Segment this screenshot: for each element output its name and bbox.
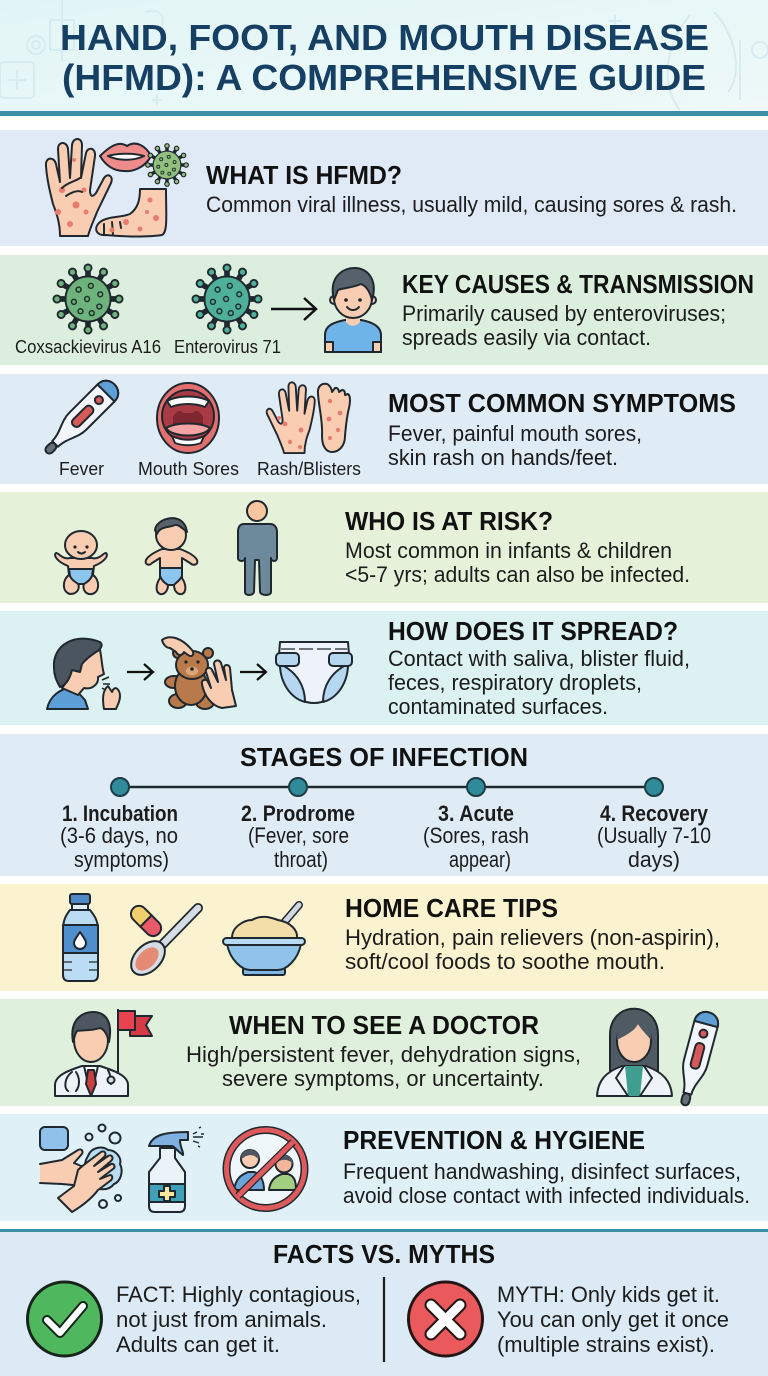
fact text: not just from animals. (116, 1307, 327, 1332)
heading: FACTS VS. MYTHS (273, 1239, 495, 1269)
panel: key causes (0, 255, 768, 365)
icon: capsule (128, 903, 164, 939)
label: Rash/Blisters (257, 458, 361, 479)
arrow (271, 298, 316, 320)
label: Coxsackievirus A16 (15, 336, 161, 357)
text: <5-7 yrs; adults can also be infected. (345, 562, 690, 587)
header rule (0, 111, 768, 116)
text: Common viral illness, usually mild, causing sores & rash. (206, 192, 737, 217)
label: Fever (59, 458, 104, 479)
heading: WHEN TO SEE A DOCTOR (229, 1010, 539, 1040)
text (402, 301, 726, 350)
panel: stages of infection (0, 734, 768, 876)
label: Mouth Sores (138, 458, 239, 479)
icon: child (325, 268, 381, 352)
panel: facts vs myths (0, 1229, 768, 1376)
icon: handwashing (40, 1124, 122, 1212)
heading: HOW DOES IT SPREAD? (388, 616, 678, 646)
icon: toddler (146, 518, 197, 594)
icon: check mark (28, 1282, 102, 1356)
label: Enterovirus 71 (174, 336, 281, 357)
text: Frequent handwashing, disinfect surfaces, (343, 1159, 741, 1184)
timeline (111, 778, 663, 796)
header (0, 0, 768, 111)
title: (HFMD): A COMPREHENSIVE GUIDE (62, 57, 706, 98)
icon: adult (238, 501, 277, 595)
stage 4: days) (628, 847, 680, 872)
text: Fever, painful mouth sores, (388, 421, 642, 446)
text (186, 1042, 581, 1091)
icon: spoon (125, 908, 198, 981)
panel: when to see a doctor (0, 999, 768, 1108)
text: Primarily caused by enteroviruses; (402, 301, 726, 326)
panel: what is HFMD (0, 130, 768, 246)
text: Hydration, pain relievers (non-aspirin), (345, 925, 720, 950)
fact text: FACT: Highly contagious, (116, 1282, 361, 1307)
heading: MOST COMMON SYMPTOMS (388, 388, 736, 418)
icon: female doctor (597, 1009, 672, 1096)
fact text: Adults can get it. (116, 1332, 280, 1357)
text: Contact with saliva, blister fluid, (388, 646, 690, 671)
heading: STAGES OF INFECTION (240, 742, 528, 772)
icon: hand, lips, virus and foot (46, 139, 188, 236)
icon: coxsackievirus (53, 264, 123, 334)
arrow (127, 664, 153, 680)
myth text: MYTH: Only kids get it. (497, 1282, 720, 1307)
icon: male doctor with red flag (55, 1009, 152, 1096)
text: spreads easily via contact. (402, 325, 651, 350)
stage 3: appear) (449, 847, 511, 872)
stage 1: (3-6 days, no (60, 823, 178, 848)
stage 1: 1. Incubation (62, 801, 178, 826)
icon: teddy bear and hands (162, 637, 236, 709)
icon: no close contact (226, 1130, 304, 1208)
stage 4: (Usually 7-10 (597, 823, 711, 848)
panel: how does it spread (0, 611, 768, 725)
divider (383, 1277, 385, 1362)
stage 1 (60, 801, 178, 872)
stage 3 (423, 801, 529, 872)
text: skin rash on hands/feet. (388, 445, 618, 470)
heading: WHAT IS HFMD? (206, 160, 402, 190)
stage 4: 4. Recovery (600, 801, 708, 826)
stage 1: symptoms) (74, 847, 169, 872)
text: Most common in infants & children (345, 538, 672, 563)
stage 2 (241, 801, 355, 872)
text: High/persistent fever, dehydration signs, (186, 1042, 581, 1067)
stage 2: throat) (274, 847, 328, 872)
icon: baby (55, 531, 107, 594)
icon: open mouth (157, 383, 219, 453)
panel: symptoms (0, 374, 768, 484)
icon: cross mark (408, 1282, 482, 1356)
panel: who is at risk (0, 492, 768, 603)
text (388, 421, 642, 470)
text: soft/cool foods to soothe mouth. (345, 949, 665, 974)
title: HAND, FOOT, AND MOUTH DISEASE (60, 17, 709, 58)
icon: water bottle (63, 894, 98, 981)
stage 2: 2. Prodrome (241, 801, 355, 826)
heading: PREVENTION & HYGIENE (343, 1125, 645, 1155)
icon: spray bottle (149, 1127, 204, 1212)
text (388, 646, 690, 719)
icon: bowl of soft food (223, 905, 305, 975)
text (345, 538, 690, 587)
myth text (497, 1282, 729, 1357)
arrow (240, 664, 266, 680)
panel: home care tips (0, 884, 768, 991)
icon: enterovirus (192, 264, 262, 334)
myth text: You can only get it once (497, 1307, 729, 1332)
heading: WHO IS AT RISK? (345, 506, 553, 536)
stage 3: 3. Acute (438, 801, 514, 826)
text: severe symptoms, or uncertainty. (222, 1066, 544, 1091)
heading: HOME CARE TIPS (345, 893, 558, 923)
icon: coughing person (47, 639, 120, 709)
icon: thermometer (38, 376, 123, 461)
stage 3: (Sores, rash (423, 823, 529, 848)
icon: thermometer (673, 1009, 721, 1108)
myth text: (multiple strains exist). (497, 1332, 715, 1357)
panel: prevention and hygiene (0, 1114, 768, 1221)
icon: rash on hand and foot (267, 382, 350, 453)
fact text (116, 1282, 361, 1357)
title (60, 17, 709, 98)
text (345, 925, 720, 974)
text: contaminated surfaces. (388, 694, 608, 719)
stage 4 (597, 801, 711, 872)
icon: diaper (276, 642, 352, 703)
stage 2: (Fever, sore (248, 823, 349, 848)
text: feces, respiratory droplets, (388, 670, 642, 695)
text (343, 1159, 750, 1208)
